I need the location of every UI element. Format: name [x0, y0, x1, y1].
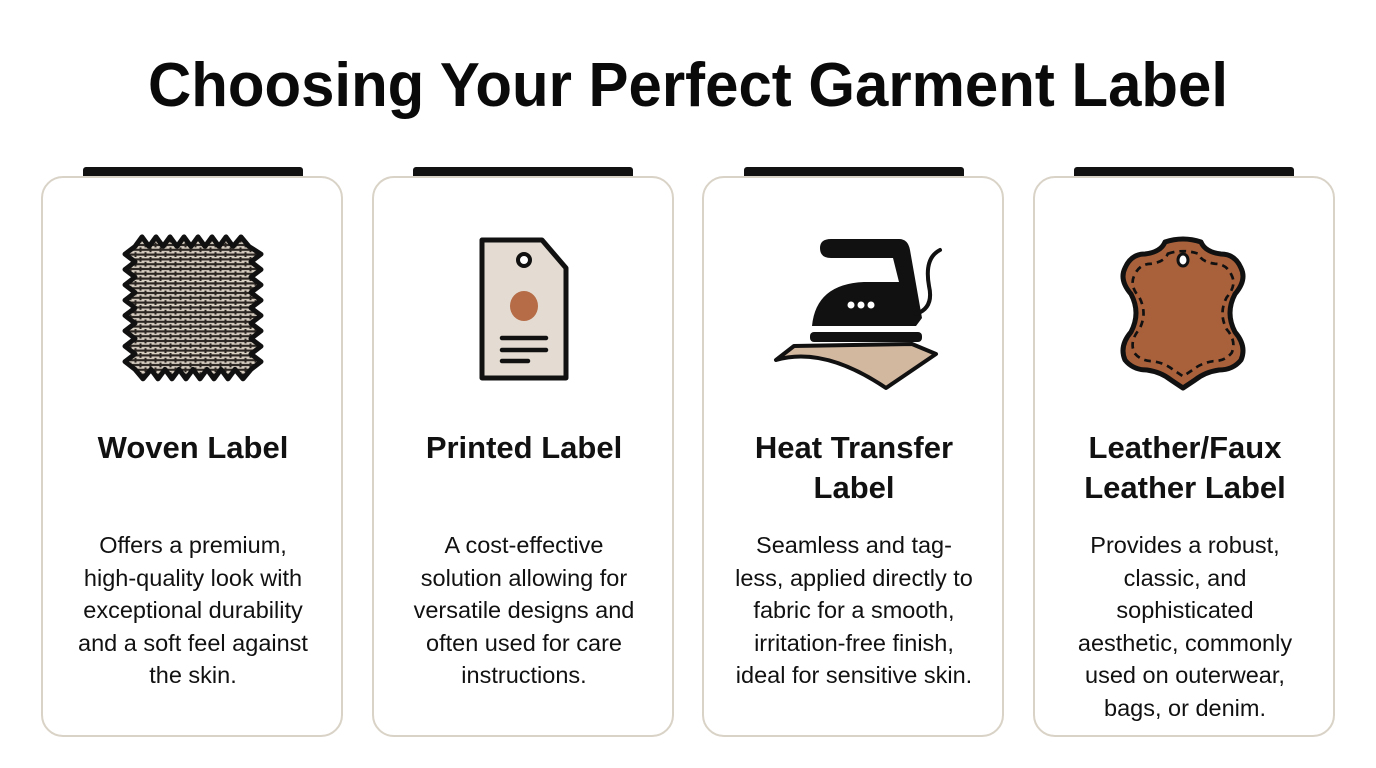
description: instructions. — [461, 662, 587, 688]
icon: leather hide — [1120, 236, 1246, 390]
description: irritation-free finish, — [754, 630, 954, 656]
description: high-quality look with — [84, 564, 302, 590]
description: versatile designs and — [414, 597, 634, 623]
heading — [1084, 430, 1286, 505]
description — [735, 532, 973, 688]
icon: woven fabric — [122, 234, 264, 382]
icon: printed tag — [480, 238, 568, 380]
description: exceptional durability — [83, 597, 303, 623]
description — [1078, 532, 1292, 721]
icon: iron — [774, 239, 942, 390]
heading: Label — [814, 470, 894, 505]
description: Provides a robust, — [1090, 532, 1280, 558]
description: Offers a premium, — [99, 532, 287, 558]
description: Seamless and tag- — [756, 532, 952, 558]
description: less, applied directly to — [735, 564, 973, 590]
description: A cost-effective — [445, 532, 603, 558]
heading: Printed Label — [426, 430, 622, 465]
description — [78, 532, 308, 688]
heading: Heat Transfer — [755, 430, 953, 465]
description — [414, 532, 634, 688]
panel: woven label — [41, 176, 343, 737]
panel: printed label — [372, 176, 674, 737]
heading — [755, 430, 953, 505]
description: ideal for sensitive skin. — [736, 662, 972, 688]
heading: Woven Label — [98, 430, 288, 465]
panel: leather label — [1033, 176, 1335, 737]
description: classic, and — [1124, 564, 1246, 590]
description: sophisticated — [1116, 597, 1254, 623]
description: fabric for a smooth, — [753, 597, 955, 623]
description: bags, or denim. — [1104, 694, 1266, 720]
heading: Leather/Faux — [1089, 430, 1281, 465]
description: and a soft feel against — [78, 630, 308, 656]
heading: Leather Label — [1084, 470, 1286, 505]
description: used on outerwear, — [1085, 662, 1285, 688]
description: solution allowing for — [421, 564, 627, 590]
title: Choosing Your Perfect Garment Label — [148, 51, 1228, 120]
panel: heat transfer label — [702, 176, 1004, 737]
description: the skin. — [149, 662, 237, 688]
description: aesthetic, commonly — [1078, 630, 1292, 656]
description: often used for care — [426, 630, 622, 656]
